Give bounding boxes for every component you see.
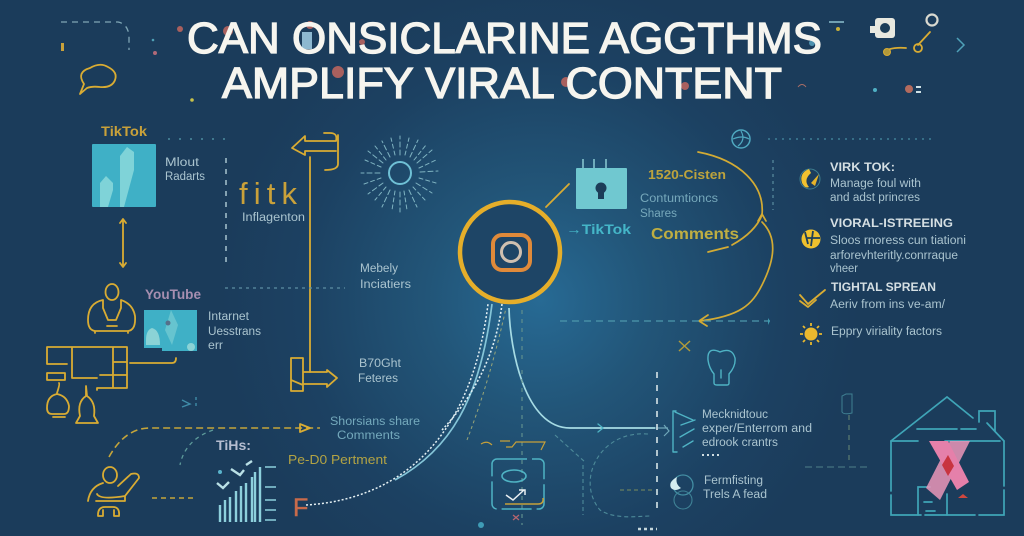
- panel: right column text: [773, 160, 966, 345]
- text: middle stats: Shares: [640, 208, 677, 220]
- panel: right column text: and adst princres: [830, 192, 920, 204]
- panel: TikTok left: [92, 123, 205, 267]
- text: middle stats: →TikTok: [566, 221, 631, 237]
- arrows: vertical yellow connector: [291, 133, 338, 391]
- panel: YouTube left: Uesstrans: [208, 326, 261, 338]
- central icon: instagram hub: [460, 202, 560, 302]
- label: Pe-D0 Pertment: Pe-D0 Pertment: [288, 452, 387, 467]
- icon: slanted lines bracket: [673, 411, 695, 452]
- icon: speech bubble: [80, 65, 116, 94]
- icon: person at desk: [47, 284, 176, 423]
- icon: yellow badge: [802, 230, 820, 248]
- icon: small x: [679, 341, 690, 351]
- icon: instagram glyph: [493, 235, 530, 270]
- text: Mlout Radarts: Mlout: [165, 157, 200, 169]
- text: Fermfisting: [703, 475, 767, 501]
- top right icon: camera network: [870, 14, 938, 56]
- dashed vertical: [656, 372, 658, 515]
- dotted horizontal: [225, 287, 345, 289]
- panel: right column text: Aeriv from ins ve-am/: [830, 299, 946, 311]
- text: Mebely Inciatiers: Inciatiers: [360, 279, 411, 291]
- text: B70Ght Feteres: Feteres: [358, 373, 398, 385]
- icon: light bulb: [708, 350, 735, 385]
- text: Mecknidtouc block: edrook crantrs: [702, 437, 778, 449]
- text: middle stats: 1520-Cisten: [648, 168, 726, 182]
- arrow: down: [120, 219, 126, 267]
- text: Mecknidtouc block: [673, 409, 812, 455]
- top right decorative marks: [798, 22, 964, 93]
- text: Shorsians share Comments: [330, 416, 420, 442]
- panel: right column text: Sloos rnoress cun tiationi: [830, 235, 966, 247]
- item: VIRK TOK: VIRK TOK:: [830, 160, 895, 174]
- arcs bottom middle: [555, 434, 655, 517]
- icon: yellow swirl: [800, 169, 820, 189]
- label: fitk Inflagenton: Inflagenton: [242, 212, 305, 224]
- arrow: yellow curve right: [698, 152, 773, 326]
- text: B70Ght Feteres: B70Ght: [359, 358, 402, 370]
- title: [177, 14, 822, 108]
- text: middle stats: [566, 168, 739, 243]
- text: Mebely Inciatiers: Mebely: [360, 263, 398, 275]
- panel: YouTube left: [144, 287, 261, 352]
- panel: YouTube left: err: [208, 340, 223, 352]
- text: Fermfisting: Trels A fead: [703, 489, 767, 501]
- title confetti: [177, 21, 815, 90]
- text: Shorsians share Comments: Shorsians share: [330, 416, 420, 428]
- text: Mecknidtouc block: exper/Enterrom and: [702, 423, 812, 435]
- text: middle stats: Comments: [651, 226, 739, 243]
- item: VIORAL-ISTREEING: VIORAL-ISTREEING: [830, 216, 953, 230]
- label: fitk Inflagenton: fitk: [239, 176, 298, 211]
- arrow: white curve to the right: [509, 308, 669, 525]
- icon: radial burst: [361, 136, 438, 212]
- panel: right column text: vheer: [830, 263, 858, 275]
- icon: TikTok tile: [92, 144, 156, 207]
- icon: YouTube tile: [144, 310, 197, 351]
- icon: person with raised arm: [88, 467, 139, 516]
- label: fitk Inflagenton: [239, 176, 305, 224]
- decorative dashes top left: [61, 22, 194, 102]
- text: Shorsians share Comments: Comments: [337, 430, 400, 442]
- dashed connector middle: [560, 320, 770, 322]
- heading: TikTok: TikTok: [101, 123, 147, 139]
- icon: globe and dotted line: [732, 130, 935, 148]
- heading: YouTube: YouTube: [145, 287, 201, 302]
- text: Mecknidtouc block: Mecknidtouc: [702, 409, 768, 421]
- label: Tills: TiHs:: [216, 437, 251, 453]
- arrow: white curve from hub to F: [306, 304, 506, 505]
- bottom dot: [478, 522, 484, 528]
- icon: house with X: [891, 397, 1004, 515]
- item: TIGHTAL SPREAN: TIGHTAL SPREAN: [831, 280, 936, 294]
- title: CAN ONSICLARINE AGGTHMS: [187, 14, 822, 63]
- bar chart: [217, 461, 276, 522]
- title: AMPLIFY VIRAL CONTENT: [222, 59, 782, 108]
- icon: pie chart: [670, 475, 693, 509]
- text: B70Ght Feteres: [358, 358, 402, 385]
- panel: TikTok left: Radarts: [165, 171, 205, 183]
- item: Eppry virality: Eppry viriality factors: [831, 326, 942, 338]
- text: Intarnet Uesstrans err: Intarnet: [208, 311, 250, 323]
- label: red F: F: [293, 494, 308, 522]
- text: Fermfisting: Fermfisting: [704, 475, 763, 487]
- panel: right column text: arforevhteritly.conrraque: [830, 250, 958, 262]
- icon: check: [800, 290, 825, 307]
- icon: phone rounded rect: [481, 441, 545, 520]
- text: Mebely Inciatiers: [360, 263, 411, 291]
- divider: [225, 158, 227, 265]
- X mark: [926, 441, 970, 500]
- icon: keyhole panel: [546, 159, 627, 209]
- text: middle stats: Contumtioncs: [640, 193, 718, 205]
- icon: sun: [800, 323, 822, 345]
- arrow: dashed yellow: [109, 424, 320, 465]
- panel: right column text: Manage foul with: [830, 178, 921, 190]
- icon: faint hand: [805, 394, 870, 467]
